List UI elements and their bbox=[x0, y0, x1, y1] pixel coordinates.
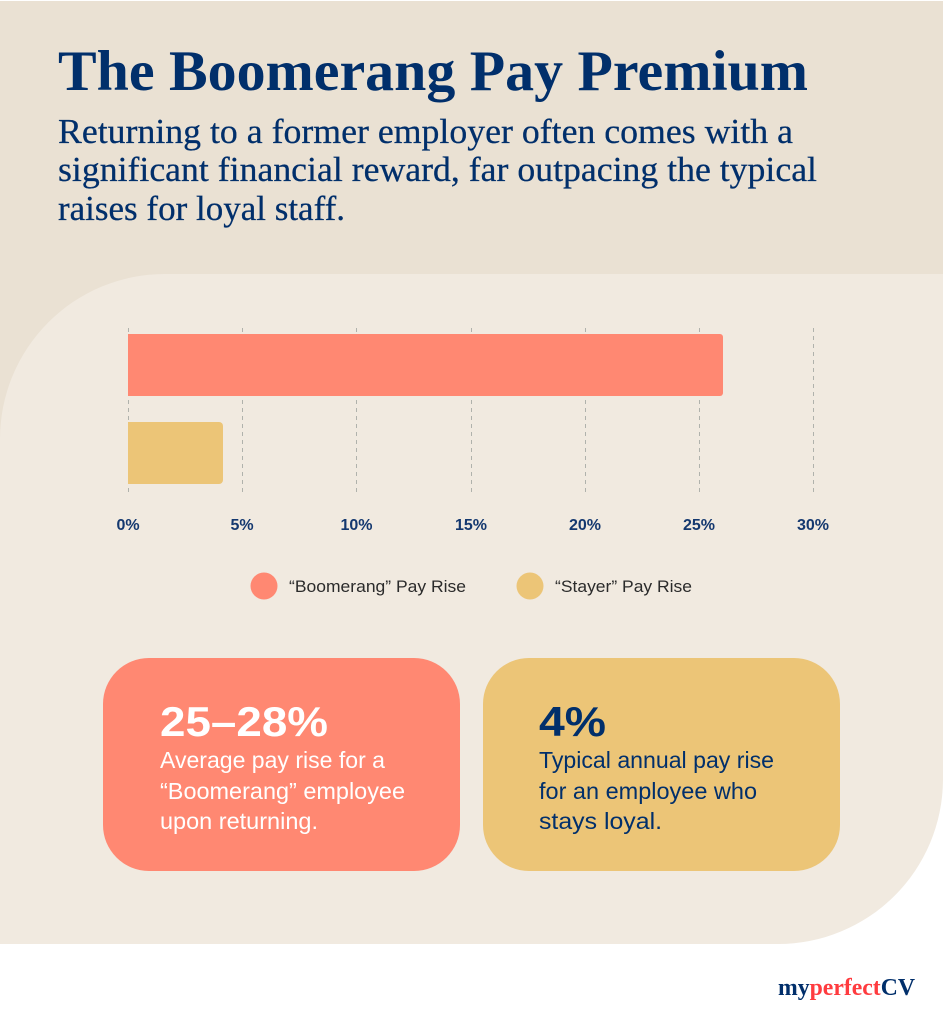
axis labels: 0% bbox=[116, 517, 140, 534]
logo: myperfectCV bbox=[778, 975, 916, 1001]
stat card: Boomerang: “Boomerang” employee bbox=[160, 778, 405, 804]
legend item: Boomerang bbox=[250, 572, 466, 600]
title: The Boomerang Pay Premium bbox=[58, 40, 808, 103]
bar chart bbox=[116, 328, 829, 534]
stat card: Boomerang: Average pay rise for a bbox=[160, 747, 385, 773]
stat card: Boomerang: 25–28% bbox=[160, 698, 328, 745]
subtitle: significant financial reward, far outpacing the typical bbox=[58, 150, 817, 189]
stat card: Stayer: 4% bbox=[539, 698, 606, 745]
axis labels: 10% bbox=[340, 517, 373, 534]
axis labels: 5% bbox=[230, 517, 254, 534]
axis labels: 15% bbox=[455, 517, 487, 534]
background header band bbox=[0, 1, 943, 501]
stat card: Stayer: stays loyal. bbox=[539, 808, 662, 834]
subtitle: Returning to a former employer often comes with a bbox=[58, 112, 793, 151]
stat card: Boomerang: upon returning. bbox=[160, 808, 318, 834]
axis labels: 30% bbox=[797, 517, 829, 534]
subtitle: raises for loyal staff. bbox=[58, 189, 345, 228]
stat card: Stayer: for an employee who bbox=[539, 778, 757, 804]
axis labels bbox=[116, 517, 829, 534]
axis labels: 25% bbox=[683, 517, 715, 534]
legend bbox=[250, 572, 692, 600]
main content panel bbox=[0, 274, 943, 944]
stat card: Stayer bbox=[483, 658, 840, 871]
stat card: Stayer: Typical annual pay rise bbox=[539, 747, 774, 773]
axis labels: 20% bbox=[569, 517, 601, 534]
bar: Stayer pay rise bbox=[128, 422, 223, 484]
legend item: Stayer bbox=[516, 572, 692, 600]
stat card: Boomerang bbox=[103, 658, 460, 871]
legend item: Stayer: “Stayer” Pay Rise bbox=[555, 577, 692, 596]
legend item: Boomerang: “Boomerang” Pay Rise bbox=[289, 577, 466, 596]
subtitle bbox=[58, 112, 817, 228]
bar: Boomerang pay rise bbox=[128, 334, 723, 396]
